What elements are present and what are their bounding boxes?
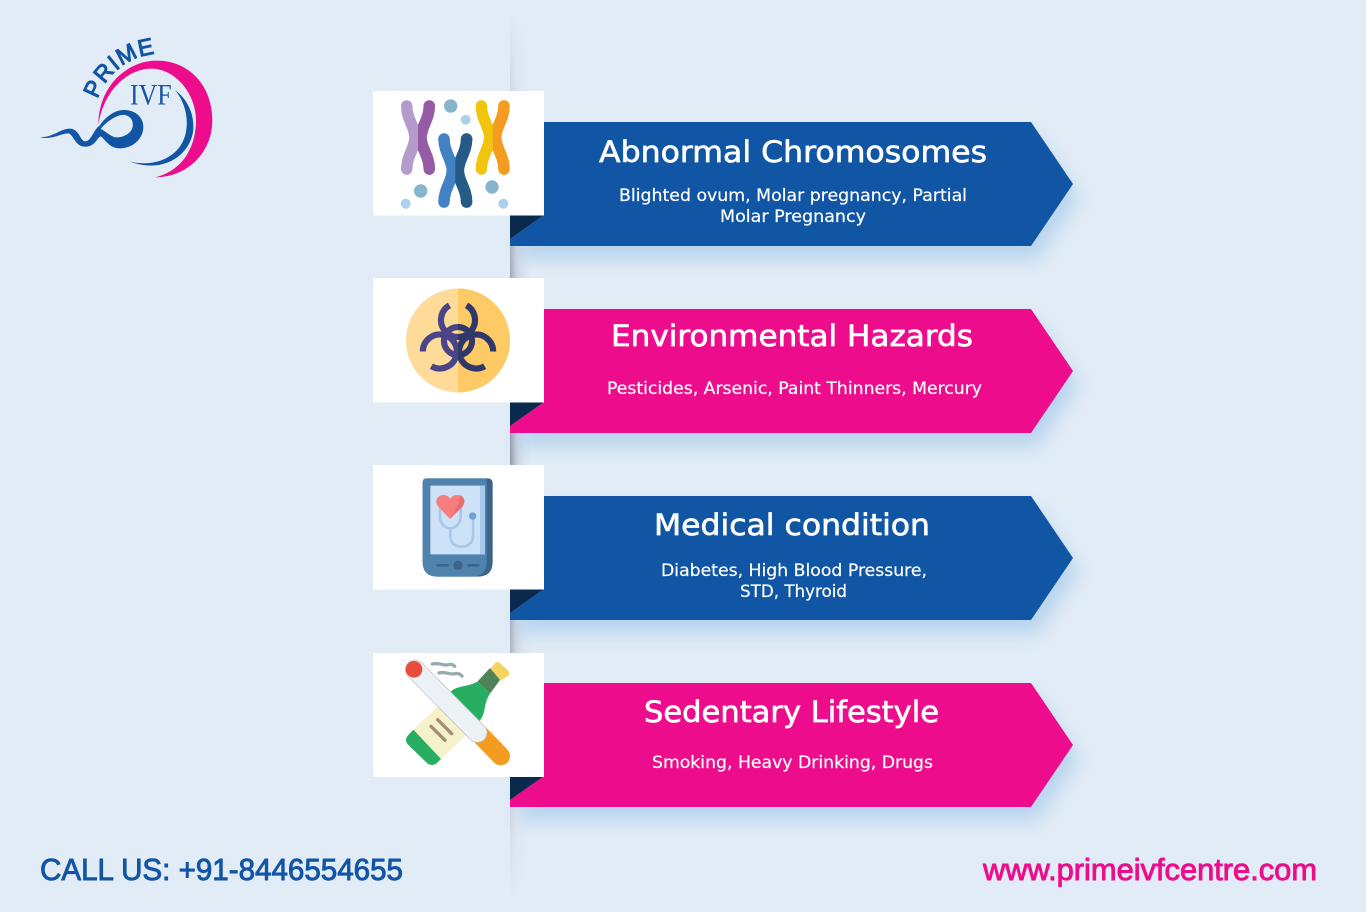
bottle	[406, 662, 509, 765]
vertical fold shadow	[510, 41, 525, 863]
heart	[436, 495, 464, 519]
cigarette	[406, 661, 501, 756]
phone body	[423, 478, 493, 577]
description	[661, 561, 927, 601]
heading: Sedentary Lifestyle	[644, 695, 939, 729]
blue chromosome	[444, 139, 467, 202]
icon card: chromosomes	[373, 91, 544, 216]
phone buttons	[438, 561, 478, 570]
icon card: biohazard	[373, 278, 544, 402]
cell dots	[401, 99, 508, 209]
logo IVF text: IVF	[130, 79, 172, 111]
logo blue crescent	[130, 90, 193, 166]
description: Molar Pregnancy	[720, 207, 866, 226]
biohazard symbol	[419, 305, 497, 374]
logo: Prime IVF: PRIME	[82, 38, 154, 98]
phone screen	[430, 486, 485, 554]
logo PRIME text	[98, 54, 163, 99]
description: Smoking, Heavy Drinking, Drugs	[652, 753, 933, 772]
banner 3: Medical condition	[510, 496, 1079, 634]
description: STD, Thyroid	[740, 582, 847, 601]
logo sperm	[39, 110, 143, 148]
heading: Environmental Hazards	[611, 319, 973, 353]
yellow chromosome	[481, 106, 504, 169]
smoke	[432, 663, 462, 676]
banner 2: Environmental Hazards	[510, 309, 1079, 447]
purple chromosome	[407, 106, 429, 169]
banner 1: Abnormal Chromosomes	[510, 122, 1079, 260]
logo: Prime IVF	[40, 38, 212, 178]
heading: Medical condition	[654, 508, 930, 542]
description	[619, 186, 967, 226]
description: Blighted ovum, Molar pregnancy, Partial	[619, 186, 967, 205]
call us contact: CALL US: +91-8446554655	[40, 853, 403, 887]
stethoscope	[440, 507, 476, 547]
icon card: medical phone	[373, 465, 544, 590]
heading: Abnormal Chromosomes	[599, 135, 987, 169]
logo pink crescent	[98, 61, 212, 177]
banner 4: Sedentary Lifestyle	[510, 683, 1079, 821]
biohazard disc	[406, 288, 510, 392]
website: www.primeivfcentre.com	[982, 853, 1317, 887]
description: Pesticides, Arsenic, Paint Thinners, Mercury	[607, 379, 982, 398]
icon card: smoking and drinking	[373, 653, 544, 777]
description: Diabetes, High Blood Pressure,	[661, 561, 927, 580]
